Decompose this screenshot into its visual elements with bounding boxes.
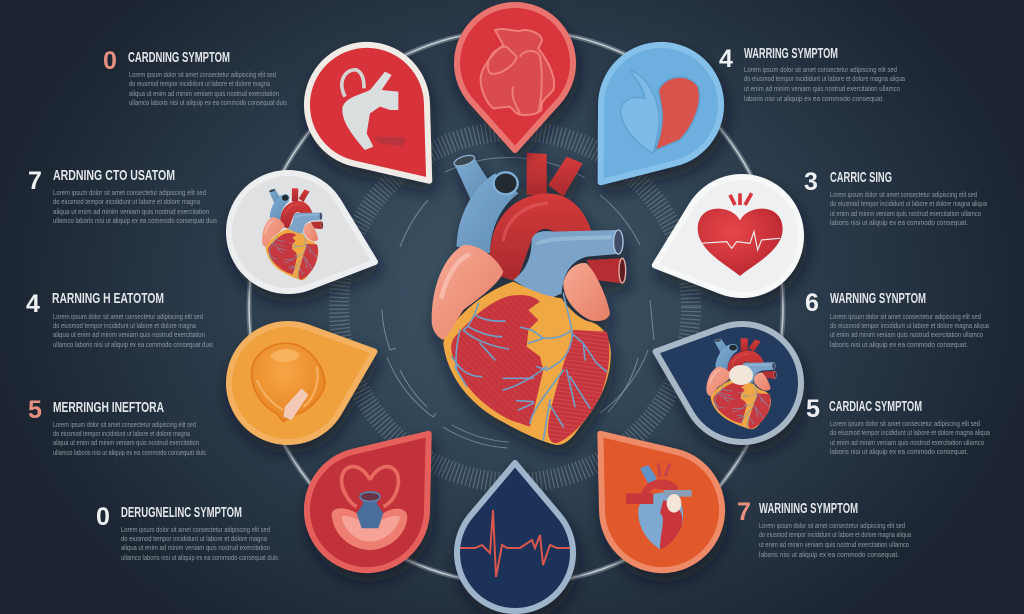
text block: 0 derugnelinc symptom: aliqua ut enim ad minim veniam quis nostrud exercitation xyxy=(121,543,270,552)
text block: 5 cardiac symptom: 5 xyxy=(806,395,820,423)
central anatomical heart xyxy=(432,153,626,445)
pin: top red heart xyxy=(457,5,573,150)
text block: 0 cardning symptom: Lorem ipsum dolor sit amet consectetur adipiscing elit sed xyxy=(129,70,276,79)
text block: 3 carric sing: CARRIC SING xyxy=(830,169,892,186)
icon: white vessel xyxy=(342,70,405,150)
text block: 4 rarning h eatotom: Lorem ipsum dolor sit amet consectetur adipiscing elit sed xyxy=(53,312,203,321)
text block: 6 warning synptom: 6 xyxy=(805,289,819,317)
icon: heart on navy xyxy=(706,338,776,429)
text block: 3 carric sing: Lorem ipsum dolor sit amet consectetur adipiscing elit sed xyxy=(830,190,977,199)
text block: 5 merringh ineftora: do eiusmod tempor incididunt ut labore et dolore magna xyxy=(53,429,191,438)
icon: split blue and red heart xyxy=(621,70,700,153)
text block: 0 cardning symptom: 0 xyxy=(103,47,117,75)
pin: left orange xyxy=(212,296,395,459)
text block: 4 warring symptom: 4 xyxy=(719,45,733,73)
icon: red heart with pulse xyxy=(698,193,783,276)
icon: valve with blue vessel xyxy=(332,467,407,550)
text block: 7 warining symptom: WARINING SYMPTOM xyxy=(759,500,858,517)
text block: 5 merringh ineftora: MERRINGH INEFTORA xyxy=(53,399,164,416)
hatched inner dial xyxy=(339,131,691,483)
text block: 5 cardiac symptom: Lorem ipsum dolor sit amet consectetur adipiscing elit sed xyxy=(830,419,980,428)
text block: 4 rarning h eatotom: 4 xyxy=(26,290,40,318)
text block: 7 warining symptom: ut enim ad minim veniam quis nostrud exercitation ullamco xyxy=(759,540,909,549)
thin inner arcs xyxy=(382,158,654,448)
text block: 7 warining symptom: laboris nisi ut aliquip ex ea commodo consequat. xyxy=(759,550,899,559)
outer ring xyxy=(249,30,783,584)
text block: 5 cardiac symptom: ut enim ad minim veniam quis nostrud exercitation ullamco xyxy=(830,438,984,447)
icon: ECG trace xyxy=(460,510,570,577)
pin: bottom-right orange xyxy=(554,396,746,594)
text block: 6 warning synptom: laboris nisi ut aliquip ex ea commodo consequat. xyxy=(830,340,968,349)
text block: 0 cardning symptom: aliqua ut enim ad minim veniam quis nostrud exercitation xyxy=(129,89,279,98)
text block: 4 warring symptom: ut enim ad minim veniam quis nostrud exercitation ullamco xyxy=(744,84,900,93)
text block: 4 rarning h eatotom: do eiusmod tempor incididunt ut labore et dolore magna xyxy=(53,321,197,330)
text block: 5 merringh ineftora: Lorem ipsum dolor sit amet consectetur adipiscing elit sed xyxy=(53,420,196,429)
text block: 7 arrding cto usatom: aliqua ut enim ad minim veniam quis nostrud exercitation xyxy=(53,207,209,216)
text block: 7 arrding cto usatom xyxy=(28,167,217,225)
text block: 0 derugnelinc symptom: do eiusmod tempor incididunt ut labore et dolore magna xyxy=(121,534,268,543)
text block: 3 carric sing: 3 xyxy=(804,168,818,196)
text block: 0 derugnelinc symptom: DERUGNELINC SYMPTOM xyxy=(121,504,242,521)
pin: right white xyxy=(636,161,817,321)
text block: 7 arrding cto usatom: do eiusmod tempor incididunt ut labore et dolore magna xyxy=(53,197,201,206)
text block: 3 carric sing: laboris nisi ut aliquip ex ea commodo consequat. xyxy=(830,218,968,227)
text block: 0 derugnelinc symptom: Lorem ipsum dolor sit amet consectetur adipiscing elit sed xyxy=(121,525,270,534)
text block: 4 rarning h eatotom: RARNING H EATOTOM xyxy=(52,290,164,307)
icon: orange organ xyxy=(252,343,325,422)
text block: 4 warring symptom: laboris nisi ut aliquip ex ea commodo consequat. xyxy=(744,94,884,103)
text block: 4 warring symptom: Lorem ipsum dolor sit amet consectetur adipiscing elit sed xyxy=(744,65,897,74)
text block: 5 cardiac symptom: CARDIAC SYMPTOM xyxy=(829,398,922,415)
text block: 4 rarning h eatotom xyxy=(26,290,213,349)
text block: 0 derugnelinc symptom xyxy=(96,503,278,562)
pin: right navy xyxy=(635,296,818,459)
text block: 4 rarning h eatotom: aliqua ut enim ad minim veniam quis nostrud exercitation xyxy=(53,330,205,339)
text block: 4 warring symptom: WARRING SYMPTOM xyxy=(744,45,838,62)
pin: top-right blue xyxy=(553,21,745,219)
text block: 0 cardning symptom: ullamco laboris nisi ut aliquip ex ea commodo consequat duis xyxy=(129,98,287,107)
text block: 0 cardning symptom: do eiusmod tempor incididunt ut labore et dolore magna xyxy=(129,79,271,88)
text block: 3 carric sing xyxy=(804,168,988,227)
text block: 7 warining symptom: 7 xyxy=(737,498,751,526)
pin: top-left red with white rim xyxy=(282,20,476,219)
icon: blue and red heart xyxy=(626,463,692,549)
text block: 6 warning synptom: Lorem ipsum dolor sit amet consectetur adipiscing elit sed xyxy=(830,312,981,321)
text block: 4 warring symptom: do eiusmod tempor incididunt ut labore et dolore magna aliqua xyxy=(744,74,906,83)
text block: 0 derugnelinc symptom: 0 xyxy=(96,503,110,531)
text block: 6 warning synptom xyxy=(805,289,990,349)
icon: small anatomical heart xyxy=(262,188,323,280)
text block: 0 derugnelinc symptom: ullamco laboris nisi ut aliquip ex ea commodo consequat duis xyxy=(121,553,278,562)
text block: 5 merringh ineftora xyxy=(28,396,206,457)
text block: 4 warring symptom xyxy=(719,45,906,103)
text block: 3 carric sing: ut enim ad minim veniam quis nostrud exercitation ullamco xyxy=(830,209,981,218)
text block: 0 cardning symptom xyxy=(103,47,287,107)
text block: 6 warning synptom: WARNING SYNPTOM xyxy=(830,290,926,307)
text block: 7 arrding cto usatom: ullamco laboris nisi ut aliquip ex ea commodo consequat duis xyxy=(53,216,217,225)
pin: bottom-left red xyxy=(283,396,475,594)
pin: bottom navy pulse xyxy=(457,463,573,611)
text block: 5 cardiac symptom xyxy=(806,395,991,456)
text block: 0 cardning symptom: CARDNING SYMPTOM xyxy=(128,49,230,66)
text block: 6 warning synptom: ut enim ad minim veniam quis nostrud exercitation ullamco xyxy=(830,330,983,339)
text block: 5 merringh ineftora: aliqua ut enim ad minim veniam quis nostrud exercitation xyxy=(53,438,199,447)
text block: 7 warining symptom: Lorem ipsum dolor sit amet consectetur adipiscing elit sed xyxy=(759,521,905,530)
text block: 7 warining symptom: do eiusmod tempor incididunt ut labore et dolore magna aliqua xyxy=(759,530,912,539)
text block: 4 rarning h eatotom: ullamco laboris nisi ut aliquip ex ea commodo consequat duis xyxy=(53,340,213,349)
pin: left white xyxy=(213,157,394,318)
text block: 5 merringh ineftora: 5 xyxy=(28,396,42,424)
text block: 5 cardiac symptom: laboris nisi ut aliquip ex ea commodo consequat. xyxy=(830,447,968,456)
text block: 5 merringh ineftora: ullamco laboris nisi ut aliquip ex ea commodo consequat duis xyxy=(53,448,206,457)
text block: 7 warining symptom xyxy=(737,498,912,559)
text block: 7 arrding cto usatom: 7 xyxy=(28,167,42,195)
icon: embossed heart xyxy=(481,29,554,115)
text block: 7 arrding cto usatom: Lorem ipsum dolor sit amet consectetur adipiscing elit sed xyxy=(53,188,206,197)
text block: 7 arrding cto usatom: ARDNING CTO USATOM xyxy=(53,167,175,184)
